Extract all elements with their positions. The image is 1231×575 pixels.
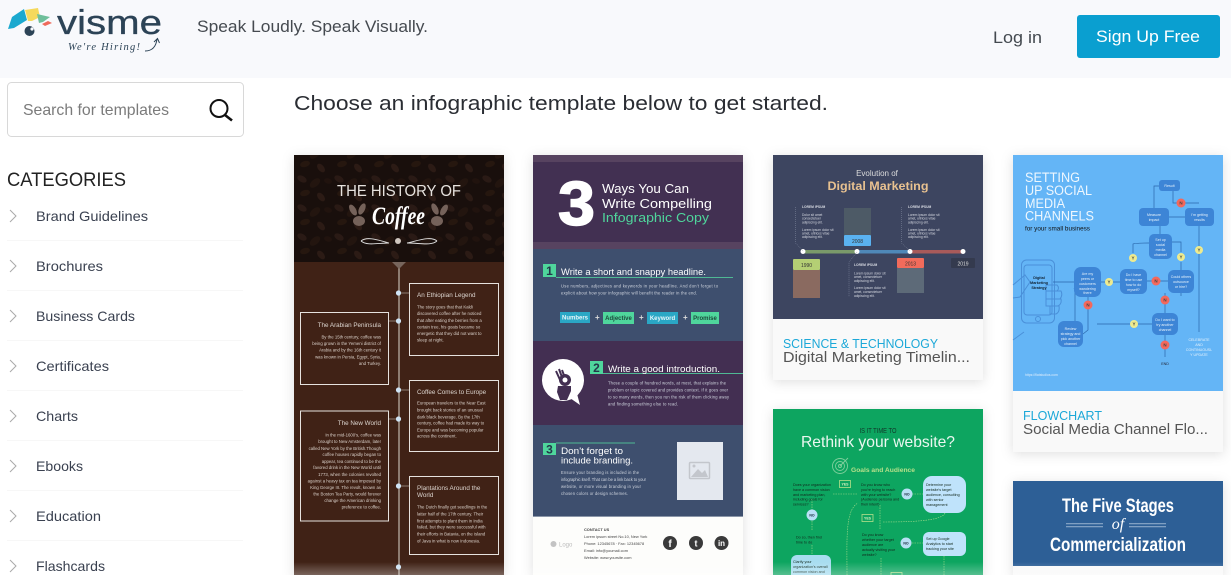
category list: Ebooks	[36, 458, 83, 474]
template card: social media flowchart	[1013, 155, 1223, 452]
flow text: you're trying to reach	[861, 488, 895, 492]
section 1: headline: Use numbers, adjectives and keywords in your headline. And don't forget to	[561, 284, 719, 288]
search box	[8, 82, 244, 136]
year 2008: 2008	[852, 239, 863, 245]
flow text: Do you know	[862, 533, 884, 537]
caption: SCIENCE & TECHNOLOGY	[783, 336, 938, 351]
decision bubbles	[791, 476, 966, 575]
yes and no circles: N	[1086, 302, 1090, 308]
process labels: how to do	[1126, 283, 1141, 287]
end labels: https://flatstudios.com	[1025, 373, 1058, 377]
box: The New World: coffee houses rapidly began to	[323, 452, 382, 457]
end labels	[1025, 338, 1212, 377]
box: The New World: favored drink in the New World until	[313, 465, 381, 470]
image placeholder	[677, 442, 723, 500]
process boxes	[1058, 180, 1214, 347]
yes and no circles: N	[1163, 298, 1167, 302]
process labels: wandering	[1079, 287, 1096, 291]
connectors	[1053, 186, 1199, 357]
formula pills	[560, 312, 719, 324]
flow text: whether your target	[862, 538, 894, 542]
template card: 3 ways infographic copy	[533, 155, 743, 575]
flowchart title: MEDIA	[1025, 196, 1065, 211]
formula pills: Numbers	[562, 316, 589, 322]
footer	[533, 516, 743, 575]
process labels: results	[1194, 218, 1205, 222]
year 2008	[844, 208, 871, 246]
box: Coffee Comes to Europe: brought back stories of an unusual	[417, 408, 483, 412]
flowchart title	[1025, 170, 1094, 232]
end labels: Y UPDATE	[1190, 353, 1208, 357]
box: An Ethiopian Legend: sleep at night.	[417, 338, 444, 342]
box: Coffee Comes to Europe: Coffee Comes to Europe	[417, 389, 487, 396]
end labels: END	[1161, 362, 1169, 366]
decision bubbles: Clarify your	[793, 560, 812, 564]
process labels: customers	[1079, 282, 1096, 286]
formula pills: +	[683, 313, 688, 322]
process labels	[1061, 184, 1208, 346]
card title	[1050, 496, 1186, 556]
category list: Certificates	[36, 358, 109, 374]
template card: history of coffee	[294, 155, 504, 575]
section 3: branding: website, or more visual branding in your	[561, 484, 642, 489]
section 2: introduction: Write a good introduction.	[608, 364, 720, 374]
box: Coffee Comes to Europe: European travelers to the Near East	[417, 400, 486, 406]
tagline: Speak Loudly. Speak Visually.	[197, 17, 428, 36]
box: The Arabian Peninsula: Arabia and by the 16th century it	[319, 348, 382, 352]
yes and no markers: NO	[903, 542, 909, 546]
lorem text blocks: adipiscing elit.	[854, 279, 875, 283]
sign up button	[1077, 15, 1220, 58]
box: The Arabian Peninsula: and Turkey.	[359, 361, 381, 366]
yes and no circles: N	[1154, 278, 1158, 284]
icon: ok hand speech bubble	[542, 359, 584, 405]
flowchart	[791, 476, 966, 575]
section 2: introduction: Those a couple of hundred words, at most, that explains the	[608, 380, 727, 386]
formula pills: Promise	[693, 316, 717, 322]
box: The New World: brought to New Amsterdam, later	[318, 439, 382, 444]
title band: Infographic Copy	[602, 210, 710, 225]
icon: magnifier	[210, 100, 232, 120]
coffee bean header	[294, 155, 504, 262]
thumbnail: Strategy	[1031, 286, 1047, 290]
box: The New World: preference to coffee.	[342, 504, 381, 510]
process labels: there	[1083, 291, 1092, 295]
flow text: time to do	[796, 540, 812, 544]
box: Coffee Comes to Europe: Europe and was becoming popular	[417, 428, 484, 432]
yes and no circles: Y	[1131, 256, 1135, 260]
box: The New World: the Boston Tea Party, would forever	[313, 492, 382, 496]
box: The New World: King George III. The revolt, known as	[310, 485, 381, 490]
box: An Ethiopian Legend: that after eating the berries from a	[417, 318, 482, 323]
box: An Ethiopian Legend: certain tree, his goats became so	[417, 324, 481, 330]
process labels: pick another	[1061, 337, 1081, 341]
flow text: audience are	[862, 543, 883, 547]
formula pills: +	[595, 313, 600, 322]
yes and no circles: Y	[1132, 322, 1136, 326]
box: The New World: 1773, when the colonies revolted	[318, 472, 382, 477]
process labels: time to use	[1125, 278, 1142, 282]
site header	[0, 0, 1231, 78]
box: Coffee Comes to Europe	[410, 380, 498, 452]
log in link: Log in	[993, 28, 1042, 47]
yes and no markers: NO	[904, 492, 910, 496]
box: The New World: change the American drinking	[324, 498, 382, 503]
box: An Ethiopian Legend: discovered coffee after he noticed	[417, 311, 482, 316]
box: The New World: appear, tea continued to be the	[322, 459, 382, 464]
title band	[533, 155, 743, 249]
lorem text blocks: Lorem ipsum dolor sit	[802, 228, 834, 232]
process labels: Do I have	[1126, 273, 1141, 277]
section 1: headline: explicit about how your infographic will benefit the reader in the end.	[561, 290, 697, 296]
box: The New World: In the mid-1600's, coffee was	[325, 432, 381, 438]
process labels: Measure	[1147, 213, 1161, 217]
title: IS IT TIME TO	[860, 426, 897, 435]
lorem text blocks: adipiscing elit.	[802, 235, 823, 239]
lorem text blocks: LOREM IPSUM	[908, 205, 932, 209]
box: Coffee Comes to Europe: century, coffee had made its way to	[417, 420, 485, 426]
thumbnail	[773, 155, 983, 319]
title	[801, 426, 955, 451]
process labels: Result	[1164, 184, 1175, 188]
box: Plantations Around the World: The Dutch finally got seedlings in the	[417, 504, 488, 510]
thumbnail	[1013, 155, 1223, 391]
lorem text blocks: Lorem ipsum dolor sit	[854, 272, 886, 276]
year 2013	[897, 258, 924, 293]
thumbnail: Digital Marketing	[828, 179, 928, 193]
year 1990: 1990	[801, 263, 812, 269]
decision bubbles: Set up Google	[926, 537, 950, 541]
footer: Website: www.yoursite.com	[584, 555, 632, 560]
yes and no circles: N	[1163, 342, 1167, 348]
section 1: headline	[533, 249, 743, 341]
lorem text blocks: Lorem ipsum dolor sit	[908, 228, 940, 232]
box: An Ethiopian Legend: An Ethiopian Legend	[417, 292, 476, 299]
year 2019	[951, 258, 975, 268]
flow text: Does your organization	[793, 483, 831, 487]
decision bubbles: website's target	[926, 488, 952, 492]
lorem text blocks: amet, ultrices vitae	[802, 232, 830, 236]
box: Plantations Around the World: World	[417, 492, 434, 499]
flowchart title: for your small business	[1025, 226, 1091, 232]
decision bubbles: Determine your	[926, 483, 952, 487]
process labels: social	[1156, 243, 1165, 247]
process labels: Could others	[1171, 275, 1191, 279]
box: Plantations Around the World: failed, but they were successful with	[417, 524, 486, 530]
yes and no markers: YES	[841, 482, 849, 486]
lorem text blocks: amet, ultrices vitae	[908, 216, 936, 220]
category list: Business Cards	[36, 308, 135, 324]
caption	[1023, 408, 1208, 438]
yes and no markers	[806, 480, 912, 575]
flow text: including goals for	[793, 498, 823, 502]
lorem text blocks: amet, ultrices vitae	[908, 232, 936, 236]
end labels: CELEBRATE	[1188, 338, 1210, 342]
footer: Email: info@youmail.com	[584, 548, 628, 553]
process labels: outsource	[1173, 280, 1189, 284]
process labels: channel	[1064, 342, 1077, 346]
flow text: Do you know who	[861, 483, 890, 487]
section 2: introduction	[533, 341, 743, 425]
yes and no markers: NO	[809, 514, 815, 518]
flowchart title: SETTING	[1025, 170, 1080, 185]
category list: Flashcards	[36, 558, 105, 574]
decision bubbles: common vision and	[793, 570, 825, 574]
process labels: Do I want to	[1155, 318, 1175, 322]
caption: Digital Marketing Timelin...	[783, 349, 970, 366]
section 2: introduction: 2	[593, 361, 600, 375]
yes and no markers: YES	[864, 516, 872, 520]
box: Plantations Around the World: their efforts in Batavia, on the island	[417, 532, 486, 536]
yes and no circles: Y	[1197, 248, 1201, 252]
logo: visme: visme	[57, 4, 162, 42]
section 3: branding: chosen colors or design schemes.	[561, 491, 628, 496]
decision bubbles: with senior	[926, 498, 944, 502]
card title: Commercialization	[1050, 535, 1186, 556]
section 3: branding: Ensure your branding is included in the	[561, 470, 640, 475]
flow text: website?	[862, 553, 877, 557]
process labels: media	[1156, 248, 1165, 252]
box: Plantations Around the World	[410, 476, 498, 554]
section 1: headline: 1	[546, 264, 553, 278]
lorem text blocks: adipiscing elit.	[908, 235, 929, 239]
box: An Ethiopian Legend	[410, 284, 498, 356]
logo: visme	[8, 4, 162, 53]
end labels: CONTINUOUSL	[1186, 348, 1212, 352]
footer: Phone: 12345678 · Fax: 12345678	[584, 541, 644, 546]
box: The Arabian Peninsula: By the 15th century, coffee was	[321, 334, 381, 340]
year 1990	[793, 259, 820, 298]
section 2: introduction: problem or topic covered and provides context. If it goes over	[608, 388, 729, 392]
year 2013: 2013	[905, 262, 916, 268]
box: The Arabian Peninsula	[300, 312, 388, 384]
section 3: branding: include branding.	[561, 456, 633, 466]
footer: Logo	[559, 542, 573, 548]
category list: Charts	[36, 408, 78, 424]
yes and no circles: Y	[1179, 254, 1183, 260]
flow text: Do so, then find	[796, 536, 822, 540]
box: Plantations Around the World: of Java in what is now Indonesia.	[417, 538, 480, 544]
timeline bar	[800, 249, 966, 254]
lorem text blocks: LOREM IPSUM	[802, 205, 826, 209]
process labels: impact	[1149, 218, 1159, 222]
box: The New World: called New York by the British.Though	[309, 446, 382, 451]
footer: Lorem ipsum street No.10, New York	[584, 534, 647, 539]
formula pills: +	[639, 313, 644, 322]
process labels: channel	[1159, 328, 1171, 332]
flowchart title: UP SOCIAL	[1025, 183, 1092, 198]
lorem text blocks: adipiscing elit.	[908, 220, 929, 224]
sidebar categories	[7, 170, 243, 574]
section 1: headline: Write a short and snappy headline.	[561, 267, 706, 277]
process labels: or hire?	[1175, 285, 1187, 289]
card title: of	[1112, 516, 1127, 533]
lorem text blocks: adipiscing elit.	[802, 220, 823, 224]
title band: Ways You Can	[602, 181, 689, 196]
process labels: strategy and	[1061, 332, 1080, 336]
process labels: Review	[1065, 327, 1077, 331]
category list: Brand Guidelines	[36, 208, 148, 224]
coffee bean header: THE HISTORY OF	[337, 183, 461, 200]
thumbnail: Digital	[1033, 276, 1045, 280]
yes and no circles	[1084, 198, 1203, 350]
section 2: introduction: and finding something else to read.	[608, 402, 678, 406]
year 2019: 2019	[957, 262, 969, 268]
category list	[36, 208, 148, 574]
box: The Arabian Peninsula: The Arabian Peninsula	[318, 322, 381, 329]
bottom fade	[250, 562, 1231, 575]
process labels: peers or	[1081, 277, 1095, 281]
box: Plantations Around the World: latter half of the 17th century. Their	[417, 512, 484, 516]
lorem text blocks	[802, 205, 940, 298]
title: Rethink your website?	[801, 434, 955, 451]
flow text: actually visiting your	[862, 548, 896, 552]
social icons: in	[718, 539, 725, 548]
coffee bean header: Coffee	[372, 203, 425, 230]
box: The New World: against a heavy tax on tea imposed by	[308, 478, 382, 484]
process labels: Are my	[1082, 272, 1093, 276]
formula pills: Adjective	[605, 316, 632, 322]
social icons: t	[694, 538, 698, 548]
yes and no circles: Y	[1107, 280, 1111, 284]
flow text: their intent)	[861, 502, 879, 506]
process labels: channel	[1154, 253, 1167, 257]
end labels: AND	[1195, 343, 1203, 347]
caption	[783, 336, 970, 366]
lorem text blocks: Dolor sit amet	[802, 213, 822, 217]
lorem text blocks: consectetuer	[802, 216, 822, 220]
icon: hand holding phone	[1013, 260, 1062, 340]
section 3: branding	[533, 425, 743, 517]
section 3: branding: Don't forget to	[561, 446, 623, 456]
thumbnail: Evolution of	[856, 169, 899, 178]
box: Plantations Around the World: Plantations Around the	[417, 485, 481, 492]
social icons	[663, 536, 728, 550]
timeline	[389, 262, 409, 575]
flow text: (Audience persona and	[861, 498, 899, 502]
box: Coffee Comes to Europe: across the continent.	[417, 434, 457, 438]
icon: target	[832, 458, 848, 474]
lorem text blocks: Lorem ipsum dolor sit	[908, 213, 940, 217]
caption: Social Media Channel Flo...	[1023, 421, 1208, 438]
categories heading: CATEGORIES	[7, 170, 126, 191]
decision bubbles: Analytics to start	[926, 542, 953, 546]
yes and no circles: N	[1179, 200, 1183, 206]
flowchart title: CHANNELS	[1025, 208, 1094, 224]
template card: five stages of commercialization	[1013, 481, 1223, 575]
section 2: introduction: to so many words, then you run the risk of them clicking away	[608, 394, 730, 400]
category list: Education	[36, 508, 101, 524]
decision bubbles: tracking your site	[926, 547, 954, 551]
title band: Write Compelling	[602, 196, 712, 211]
template card: rethink your website	[773, 409, 983, 575]
process labels: try another	[1156, 323, 1174, 327]
lorem text blocks: adipiscing elit.	[854, 294, 875, 298]
search box: Search for templates	[23, 102, 169, 119]
footer: CONTACT US	[584, 527, 610, 532]
decision bubbles: organization's overall	[793, 565, 828, 569]
logo: visme: We're Hiring!	[68, 42, 140, 53]
lorem text blocks: amet, consectetuer	[854, 290, 883, 294]
goals heading: Goals and Audience	[851, 467, 915, 474]
decision bubbles: audience, consulting	[926, 493, 960, 497]
lorem text blocks: LOREM IPSUM	[854, 263, 878, 267]
social icons: f	[668, 539, 672, 550]
card title: The Five Stages	[1062, 496, 1174, 517]
process labels: Set up	[1155, 238, 1166, 242]
lorem text blocks: Lorem ipsum dolor sit	[854, 286, 886, 290]
lorem text blocks: amet, consectetuer	[854, 275, 883, 279]
box: The Arabian Peninsula: being grown in the Yemeni district of	[312, 341, 382, 346]
section 3: branding: 3	[546, 442, 553, 456]
box: Plantations Around the World: first attempts to plant them in India	[417, 518, 483, 524]
box: An Ethiopian Legend: energetic that they did not want to	[417, 331, 482, 336]
section 3: branding: infographic itself. That can be a link back to your	[561, 477, 647, 482]
process labels: myself?	[1127, 288, 1140, 292]
box: An Ethiopian Legend: The story goes that that Kaldi	[417, 304, 473, 310]
caption: FLOWCHART	[1023, 408, 1102, 423]
box: The New World: The New World	[338, 420, 381, 427]
thumbnail: Marketing	[1030, 281, 1049, 285]
title band: 3	[558, 170, 595, 239]
process labels: I'm getting	[1191, 213, 1208, 217]
box: The New World	[300, 411, 388, 521]
flow text: services?	[793, 502, 809, 506]
decision bubbles: management	[926, 503, 948, 507]
box: The Arabian Peninsula: was known in Persia, Egypt, Syria,	[315, 354, 381, 360]
flow text: have a common vision	[793, 488, 830, 492]
flow text: and marketing plan,	[793, 493, 825, 497]
category list: Brochures	[36, 258, 103, 274]
page heading: Choose an infographic template below to get started.	[294, 93, 828, 115]
flow text	[793, 483, 899, 557]
formula pills: Keyword	[650, 316, 676, 322]
flow text: with your website?	[861, 493, 891, 497]
sign up button: Sign Up Free	[1096, 27, 1200, 46]
box: Coffee Comes to Europe: dark black beverage. By the 17th	[417, 414, 480, 420]
template card: digital marketing timeline	[773, 155, 983, 380]
